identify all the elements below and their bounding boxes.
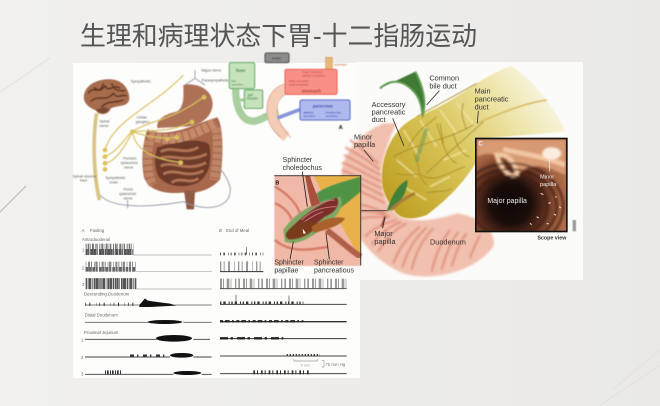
label A: A [339, 125, 343, 131]
inset C: scope view [475, 138, 568, 232]
labels: duct names: papilla [374, 237, 396, 246]
inset B labels: Sphincter [314, 260, 344, 267]
liver: liver [236, 68, 246, 73]
nerve fibres [105, 75, 203, 163]
column headings [81, 228, 249, 377]
column headings: 1 [82, 248, 85, 253]
labels: duct names: Main [475, 87, 491, 96]
stomach box: meal emptying [289, 82, 308, 86]
leader lines [361, 91, 478, 228]
labels: duct names: Accessory [372, 100, 406, 109]
brain box: brain [272, 55, 281, 60]
nerve labels: ganglion [136, 120, 149, 124]
pelvic nerve [100, 70, 230, 208]
inset B labels: choledochus [283, 165, 322, 172]
pancreas box: alkaline [303, 111, 314, 115]
inset B labels [274, 157, 355, 275]
nerve labels: Parasympathetic [202, 79, 229, 83]
column headings: 2 [82, 265, 85, 270]
nerve labels: nerve [124, 165, 133, 169]
panel: pancreas and duodenum anatomy [274, 66, 576, 276]
title: 生理和病理状态下胃-十二指肠运动 [80, 22, 477, 51]
end of meal traces [220, 247, 347, 374]
nerve labels: nerve [99, 124, 108, 128]
column headings: A [81, 228, 85, 233]
column headings: 1 [81, 338, 84, 343]
column headings: Proximal Jejunum [84, 330, 119, 335]
inset B: sphincter of Oddi [274, 172, 361, 266]
nerve labels: Spinal [99, 119, 110, 123]
inset C: scope view: Major papilla [487, 198, 527, 205]
pancreas box [300, 100, 350, 120]
nerve labels: tract [80, 179, 87, 183]
stomach box: basic secretion [289, 79, 309, 83]
panel: left white background [73, 63, 360, 378]
inset C: scope view: papilla [540, 182, 557, 188]
icon: small intestine [155, 141, 210, 186]
inset B: sphincter of Oddi: B [275, 181, 279, 187]
nerve labels: chain [109, 180, 118, 184]
column headings: 2 [81, 355, 84, 360]
scale bar: 75 mm Hg [325, 362, 346, 367]
labels: duct names: bile duct [429, 82, 457, 91]
pancreas box: secretion [326, 114, 338, 118]
chart: antroduodenal manometry traces [81, 228, 347, 377]
gall bladder [244, 90, 263, 108]
pancreatic duct [277, 109, 301, 118]
scale bar [294, 359, 346, 367]
gall bladder: bladder [247, 97, 259, 101]
nerve labels [73, 68, 229, 200]
inset B labels: papillae [274, 268, 299, 275]
labels: duct names: papilla [354, 140, 376, 149]
pancreas box: secretion [303, 114, 316, 118]
spinal cord [94, 113, 99, 200]
nerve labels: Sympathetic [131, 79, 151, 83]
labels: duct names: Minor [354, 132, 373, 141]
artist signature [573, 220, 576, 231]
nerve labels: Pelvic [123, 188, 133, 192]
panel: right white background [355, 62, 583, 280]
fasting phase III bursts [139, 298, 201, 375]
panel: nervous system and digestive tract anatomy [73, 68, 230, 209]
nerve labels: Thoracic [123, 157, 137, 161]
column headings: End of Meal [226, 228, 249, 233]
inset C: scope view: C [478, 142, 483, 148]
stomach box [285, 69, 337, 94]
icon: stomach [157, 84, 213, 128]
nerve labels: splanchnic [119, 192, 136, 196]
liver: bile [231, 79, 236, 83]
liver [229, 63, 255, 89]
nerve labels: splanchnic [121, 161, 138, 165]
common bile duct [380, 72, 424, 115]
nerve labels: Vagus nerve [201, 68, 221, 72]
liver: secretion [231, 83, 244, 87]
labels: duct names: Major [374, 229, 393, 238]
esophagus: esophagus [334, 62, 348, 66]
ganglia [103, 95, 206, 172]
pancreas box: pancreas [313, 103, 334, 108]
major papilla duct [382, 180, 415, 227]
fasting traces [85, 249, 212, 374]
duodenum [341, 123, 494, 276]
column headings: Descending Duodenum [84, 291, 130, 296]
labels: duct names: pancreatic [475, 95, 509, 104]
pancreas box: bicarbonate [326, 111, 342, 115]
column headings: Fasting [90, 228, 105, 233]
stomach box: gastric emptying [303, 73, 325, 77]
column headings: 3 [81, 372, 84, 377]
nerve labels: Spinal visceral [73, 174, 96, 178]
labels: duct names: duct [475, 102, 489, 111]
labels: duct names: Common [429, 74, 459, 83]
labels: duct names [354, 74, 509, 247]
inset B labels: Sphincter [283, 157, 313, 164]
column headings: 3 [82, 282, 85, 287]
rectum [184, 191, 195, 209]
scale bar: 5 min [301, 362, 310, 367]
labels: duct names: Duodenum [430, 238, 466, 247]
labels: duct names: pancreatic [372, 107, 406, 116]
column headings: Antroduodenal [82, 237, 110, 242]
stomach box: stomach [302, 88, 321, 93]
inset C: scope view: Minor [540, 174, 554, 180]
nerve labels: nerve [123, 196, 132, 200]
icon: brain [84, 79, 129, 114]
nerve labels: Sympathetic [105, 176, 126, 180]
scope view caption: Scope view [537, 235, 567, 241]
nerve labels: Celiac [137, 116, 147, 120]
green bile duct [236, 88, 278, 121]
labels: duct names: duct [372, 115, 386, 124]
icon: large intestine [142, 117, 222, 193]
duodenum arc [272, 89, 287, 137]
inset B labels: pancreatious [314, 268, 355, 275]
stomach box: basic secretion [303, 70, 323, 74]
column headings: B [219, 228, 222, 233]
diagram A: bile and pancreatic secretion flow [229, 53, 350, 137]
column headings: Distal Duodenum [85, 312, 118, 317]
gall bladder: gall [248, 93, 253, 97]
inset B labels: Sphincter [274, 260, 305, 267]
pancreas [382, 66, 565, 218]
